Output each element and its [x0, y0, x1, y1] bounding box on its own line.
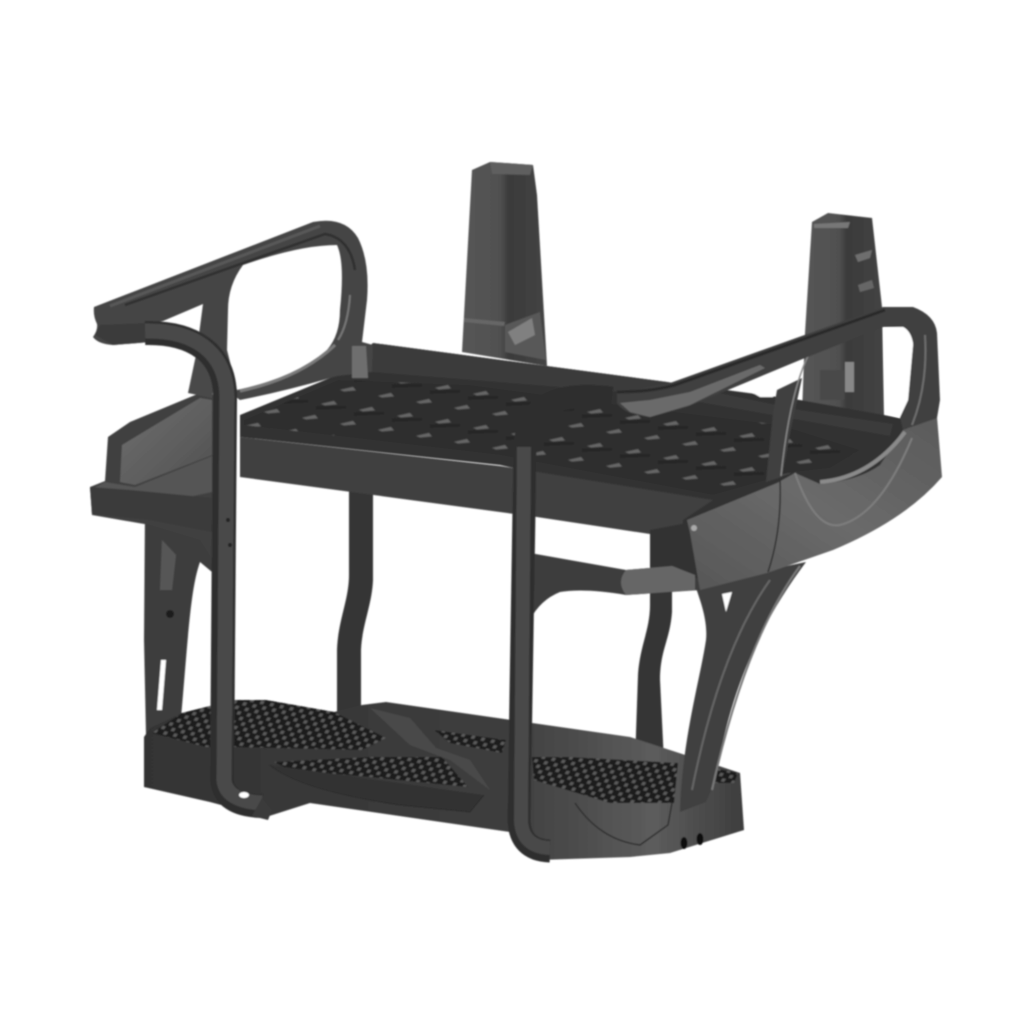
left armrest rail — [93, 221, 373, 400]
right rear leg — [635, 530, 672, 762]
right bracket — [680, 562, 806, 812]
mesh: middle tread — [274, 757, 468, 787]
left armrest side panel — [90, 393, 216, 565]
right armrest rail — [617, 307, 940, 430]
footplate — [144, 700, 744, 860]
right arm strut — [766, 352, 810, 482]
mesh: right tread — [532, 757, 678, 803]
right front tube — [519, 396, 612, 851]
seat deck — [240, 343, 908, 528]
right seat post — [802, 213, 884, 417]
mesh: left tread — [152, 700, 386, 750]
rail opening — [884, 327, 913, 417]
right armrest side panel — [687, 417, 942, 590]
left seat post — [462, 162, 547, 366]
left bracket — [144, 510, 212, 735]
mesh: far right tread — [706, 767, 738, 783]
deck tread pattern — [244, 380, 860, 495]
deck back wall — [372, 343, 893, 436]
left front tube — [145, 331, 272, 820]
centre rear leg — [337, 480, 373, 720]
left arm strut — [188, 350, 220, 398]
front beam — [240, 437, 713, 534]
under-deck block — [650, 522, 700, 590]
mesh: rear tread — [434, 730, 506, 753]
lower brace — [530, 553, 700, 620]
